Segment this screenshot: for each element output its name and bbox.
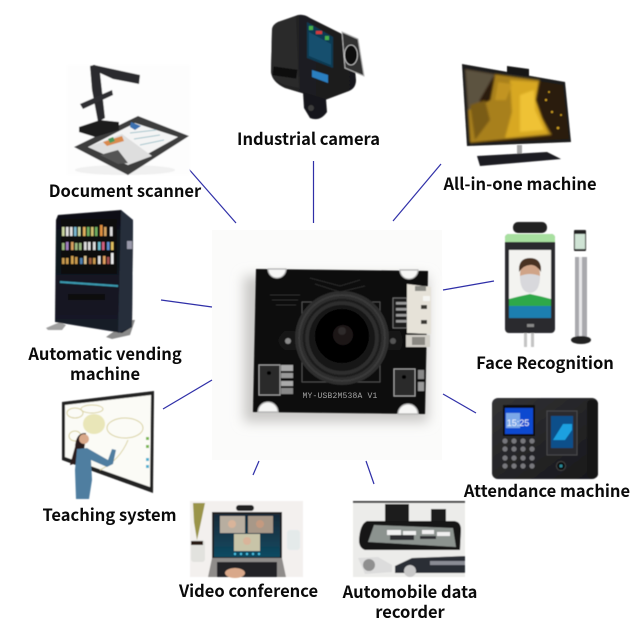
icon: action camera <box>271 15 364 119</box>
heading: Document scanner: Document scanner <box>49 178 202 202</box>
icon: vending machine <box>46 210 135 339</box>
icon: document scanner <box>67 65 190 175</box>
icon: teaching whiteboard with presenter <box>62 391 154 499</box>
sensor outline and mount <box>302 302 380 382</box>
heading: All-in-one machine: All-in-one machine <box>442 171 597 195</box>
panel: camera board photo <box>212 230 442 460</box>
heading: Automobile data recorder <box>342 579 477 623</box>
heading: Industrial camera: Industrial camera <box>237 126 380 150</box>
icon: video conference laptop <box>190 501 303 578</box>
heading: Automobile data recorder: Automobile data <box>342 579 477 603</box>
heading: Teaching system: Teaching system <box>42 502 177 526</box>
attendance clock readout: 15:25 <box>507 418 529 428</box>
icon: all-in-one computer <box>462 64 571 166</box>
surface-mount components <box>259 365 424 396</box>
faint traces <box>270 278 365 305</box>
camera board <box>253 269 431 414</box>
board silkscreen label: MY-USB2M538A V1 <box>302 392 378 401</box>
heading: Attendance machine: Attendance machine <box>463 478 630 502</box>
icon: attendance machine <box>492 398 598 479</box>
heading: Face Recognition: Face Recognition <box>476 350 614 374</box>
heading: Automobile data recorder: recorder <box>375 599 446 623</box>
connector <box>393 284 431 347</box>
icon: automobile data recorder <box>353 501 465 577</box>
lens <box>295 291 389 385</box>
heading: Automatic vending machine: machine <box>70 361 140 385</box>
heading: Automatic vending machine: Automatic vending <box>27 341 182 365</box>
connector lines <box>161 161 494 484</box>
heading: Automatic vending machine <box>27 341 182 385</box>
heading: Video conference: Video conference <box>178 578 318 602</box>
icon: face recognition terminal <box>505 222 591 347</box>
mounting holes <box>258 269 418 414</box>
